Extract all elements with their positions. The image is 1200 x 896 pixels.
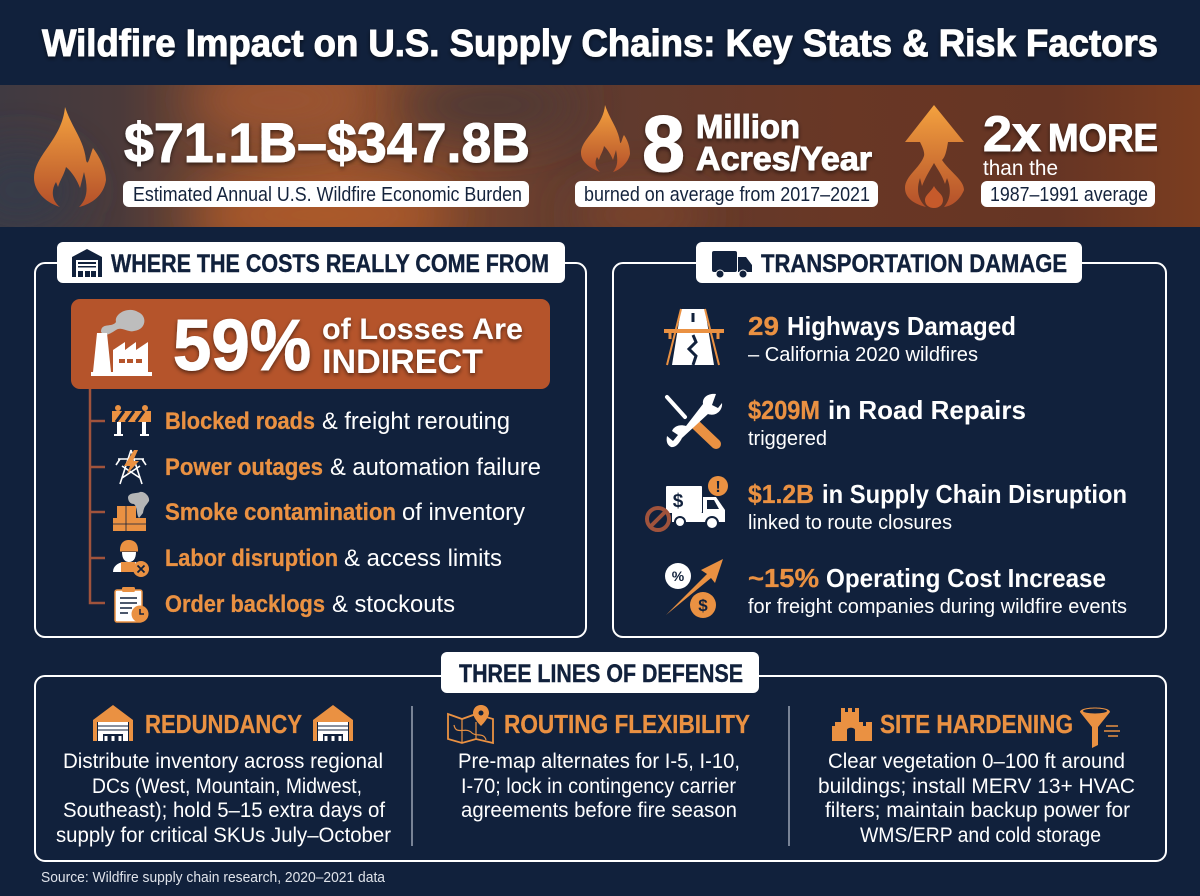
stat: two times more: 1987–1991 average [990,184,1148,206]
stat: two times more: than the [983,157,1058,180]
list item: order backlogs [115,587,455,622]
stat row: operating cost increase: Operating Cost Increase [826,563,1106,593]
panel: key stats banner [0,85,1200,227]
icon: rising arrow with percent and dollar: % [672,568,685,584]
list item: power outages [116,450,541,484]
icon: warehouse [313,705,353,741]
stat row: road repairs: in Road Repairs [828,395,1026,425]
stat row: supply chain disruption [647,476,1127,534]
icon: crossed wrench and screwdriver [667,394,722,447]
icon: castle [832,708,872,741]
stat: acres per year: Million [696,108,800,145]
callout: 59 percent indirect [71,299,550,389]
callout: 59 percent indirect: INDIRECT [322,343,483,381]
stat: economic burden [123,111,530,207]
panel: transportation damage [613,242,1166,637]
heading: transportation damage [696,242,1082,283]
stat row: supply chain disruption: linked to route closures [748,512,952,534]
list item: smoke contamination [113,492,525,531]
icon: flame arrow [905,105,964,208]
column: redundancy [56,705,391,847]
column: site hardening: buildings; install MERV 13+ HVAC [818,775,1135,798]
icon: flame [34,107,106,207]
list item: blocked roads: & freight rerouting [322,408,510,435]
list item: labor disruption: Labor disruption [165,545,338,572]
stat row: operating cost increase [665,559,1127,618]
list item: power outages: Power outages [165,454,323,481]
source note: Source: Wildfire supply chain research, 2020–2021 data [41,869,386,886]
heading: three lines of defense: THREE LINES OF DEFENSE [459,660,743,688]
connector tree [90,389,105,603]
stat: two times more: 2x [983,106,1041,162]
column: redundancy: Distribute inventory across regional [63,750,383,773]
stat row: highways damaged [664,309,1016,366]
stat: two times more [981,106,1158,207]
list item: order backlogs: & stockouts [332,591,455,618]
column: redundancy: DCs (West, Mountain, Midwest, [92,775,362,798]
column: redundancy: REDUNDANCY [145,709,302,739]
column: routing flexibility: agreements before fire season [461,799,737,822]
stat row: highways damaged: 29 [748,311,779,341]
heading: where the costs really come from: WHERE THE COSTS REALLY COME FROM [111,250,549,278]
column: site hardening: Clear vegetation 0–100 ft around [828,750,1125,773]
column: site hardening: SITE HARDENING [880,709,1073,739]
icon: truck with warning: $ [673,491,684,512]
list item: blocked roads [112,405,510,436]
list item: power outages: & automation failure [330,454,541,481]
stat: economic burden: Estimated Annual U.S. Wildfire Economic Burden [133,184,522,206]
column: redundancy: supply for critical SKUs July–October [56,824,391,847]
column: routing flexibility: Pre-map alternates for I-5, I-10, [458,750,740,773]
icon: power pylon [116,450,146,484]
stat row: supply chain disruption: in Supply Chain Disruption [822,479,1127,509]
list item: labor disruption: & access limits [344,545,502,572]
icon: factory [91,310,152,376]
column: routing flexibility: ROUTING FLEXIBILITY [504,709,750,739]
callout: 59 percent indirect: of Losses Are [322,313,523,346]
list item: labor disruption [113,540,502,577]
stat row: road repairs: triggered [748,428,827,450]
icon: worker with x badge [113,540,149,577]
stat: acres per year: 8 [642,99,685,188]
heading: transportation damage: TRANSPORTATION DAMAGE [761,250,1067,278]
column: redundancy: Southeast); hold 5–15 extra days of [63,799,385,822]
panel: where the costs come from [35,242,586,637]
stat row: operating cost increase: ~15% [748,563,819,593]
stat row: highways damaged: – California 2020 wildfires [748,344,978,366]
icon: truck with warning [647,476,728,530]
icon: warehouse [93,705,133,741]
icon: clipboard with clock [115,587,148,622]
column: site hardening [818,708,1135,847]
icon: smoke over boxes [113,492,149,531]
callout: 59 percent indirect: 59% [173,306,311,386]
list item: blocked roads: Blocked roads [165,408,315,435]
stat row: road repairs [667,394,1026,450]
column: routing flexibility [448,705,750,822]
stat: economic burden: $71.1B–$347.8B [124,111,530,174]
stat row: road repairs: $209M [748,395,820,425]
column: site hardening: filters; maintain backup power for [825,799,1130,822]
panel: three lines of defense [35,652,1166,861]
icon: small flame [581,105,630,172]
stat: acres per year: Acres/Year [696,140,872,177]
icon: rising arrow with percent and dollar [665,559,723,618]
stat row: operating cost increase: for freight companies during wildfire events [748,596,1127,618]
stat row: supply chain disruption: $1.2B [748,479,814,509]
column: routing flexibility: I-70; lock in contingency carrier [461,775,736,798]
icon: map with pin [448,705,493,743]
list item: order backlogs: Order backlogs [165,591,325,618]
column: site hardening: WMS/ERP and cold storage [860,824,1101,847]
heading: three lines of defense [441,652,759,693]
icon: air filter funnel [1080,708,1120,748]
icon: cracked highway [664,309,724,365]
list item: smoke contamination: Smoke contamination [165,499,396,526]
icon: road barrier [112,405,151,436]
title: Wildfire Impact on U.S. Supply Chains: Key Stats & Risk Factors [42,23,1158,65]
stat row: highways damaged: Highways Damaged [787,311,1016,341]
stat: acres per year: burned on average from 2017–2021 [584,184,870,206]
heading: where the costs really come from [57,242,565,283]
icon: truck with warning: ! [715,479,721,496]
list item: smoke contamination: of inventory [402,499,525,526]
icon: rising arrow with percent and dollar: $ [698,596,708,615]
stat: two times more: MORE [1048,117,1158,160]
stat: acres per year [575,99,878,207]
